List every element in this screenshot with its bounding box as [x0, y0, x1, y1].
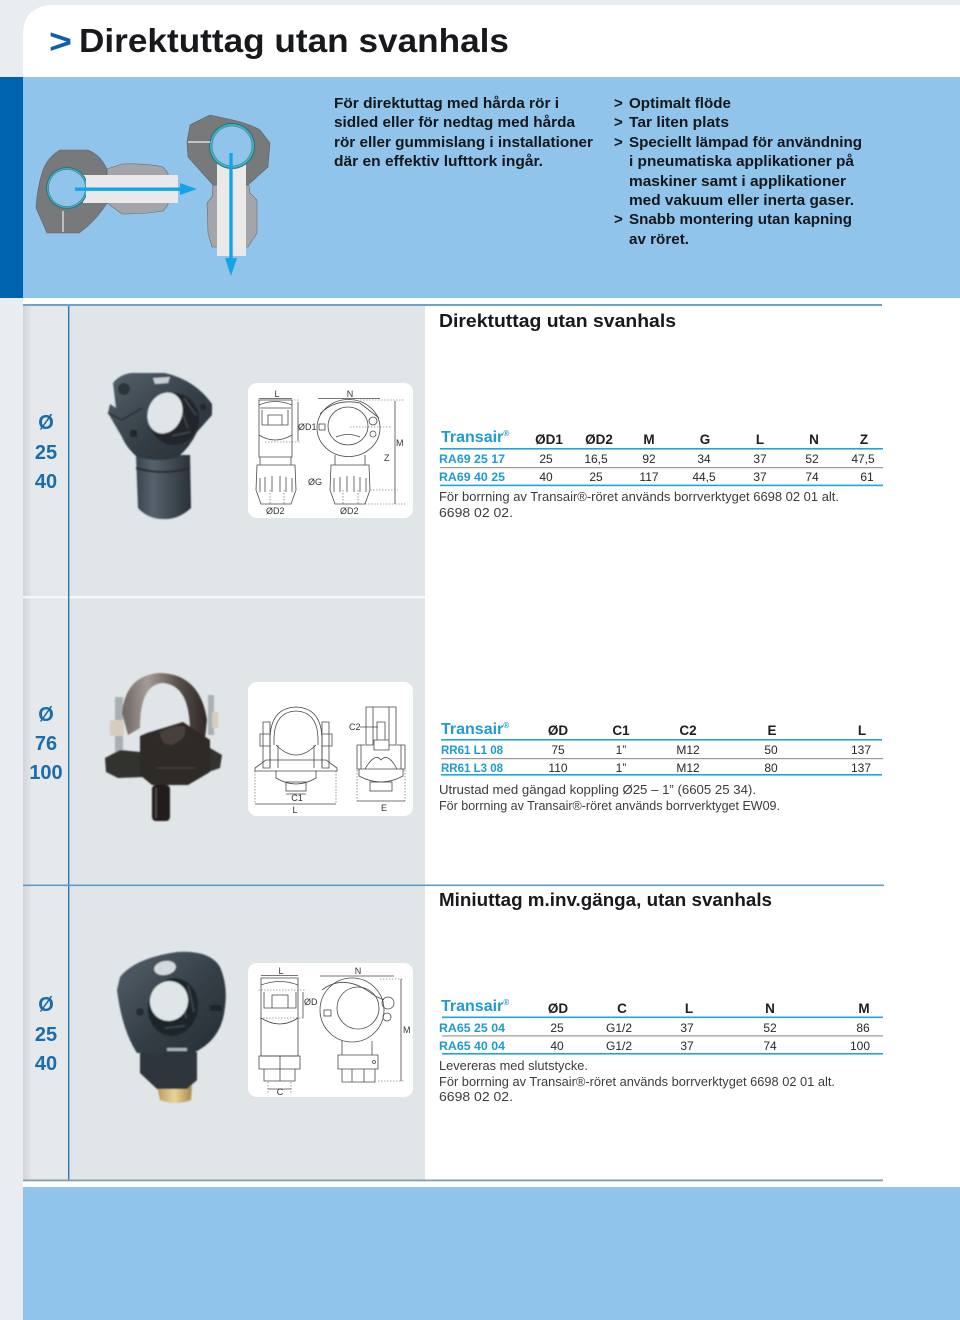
table: RR61: C2 — [679, 723, 697, 738]
benefits list: maskiner samt i applikationer — [629, 173, 846, 190]
technical drawing card: RA69 — [248, 383, 413, 518]
diameter labels: section 1: 25 — [35, 442, 57, 464]
table: RA65 — [439, 998, 883, 1055]
diameter labels: section 2 — [29, 704, 63, 784]
drawing: RA65 side view — [320, 976, 404, 1082]
diameter labels: section 3 — [35, 994, 57, 1075]
diameter labels: section 1 — [35, 412, 57, 493]
intro text: rör eller gummislang i installationer — [334, 134, 593, 151]
table: RA69: M — [643, 432, 655, 447]
note: RA69: 6698 02 02. — [439, 505, 513, 520]
table: RR61 — [441, 721, 883, 776]
benefits list — [614, 95, 862, 248]
dimension labels: RA69: ØG — [308, 477, 322, 487]
diameter labels: section 3: 40 — [35, 1053, 57, 1075]
table: RA65: RA65 25 04 — [439, 1021, 505, 1035]
table: RA69: Z — [860, 432, 868, 447]
dimension labels: RA69: Z — [384, 453, 390, 463]
table: RA65: 74 — [763, 1039, 777, 1053]
panel: grey product column — [23, 304, 884, 1181]
dimension labels: RA69: ØD2 — [266, 506, 285, 516]
table: RR61: C1 — [612, 723, 630, 738]
diameter labels: section 1: 40 — [35, 471, 57, 493]
table: RA69: Transair — [441, 429, 503, 446]
benefits list: i pneumatiska applikationer på — [629, 153, 855, 170]
table: RA69: 44,5 — [692, 470, 716, 484]
table: RR61: 110 — [548, 761, 568, 775]
table: RR61: 75 — [551, 743, 565, 757]
intro text: där en effektiv lufttork ingår. — [334, 153, 543, 170]
panel: intro band — [0, 77, 960, 298]
note: RA69: För borrning av Transair®-röret används borrverktyget 6698 02 01 alt. — [439, 489, 839, 504]
drawing: RA69 front view — [256, 398, 300, 505]
drawing: RA69 side view — [317, 398, 405, 505]
dimension labels: RA65: M — [403, 1025, 410, 1035]
benefits list: > — [614, 211, 623, 228]
note: RA65: För borrning av Transair®-röret används borrverktyget 6698 02 01 alt. — [439, 1074, 835, 1089]
benefits list: > — [614, 95, 623, 112]
diameter labels: section 2: 76 — [35, 733, 57, 755]
table: RR61: Transair — [441, 721, 503, 738]
diameter labels: section 2: 100 — [29, 762, 63, 784]
table: RA69: G — [700, 432, 710, 447]
table: RR61: 50 — [764, 743, 778, 757]
note: RA65: Levereras med slutstycke. — [439, 1058, 588, 1073]
dimension labels: RR61 — [291, 722, 387, 815]
table: RA65: RA65 40 04 — [439, 1039, 505, 1053]
table: RA65: G1/2 — [606, 1021, 632, 1035]
table: RA69: 61 — [860, 470, 874, 484]
dimension labels: RA69 — [266, 389, 404, 516]
table: RA65: 37 — [680, 1021, 694, 1035]
diameter labels: section 3: Ø — [38, 994, 54, 1016]
icon: side outlet diagram — [36, 150, 197, 233]
table: RA65: Transair — [441, 998, 503, 1015]
table: RA65: 100 — [850, 1039, 870, 1053]
photo: clamp outlet RA69 — [108, 373, 212, 519]
table: RR61: 80 — [764, 761, 778, 775]
diameter labels: section 3: 25 — [35, 1024, 57, 1046]
table: RR61: M12 — [676, 743, 700, 757]
dimension labels: RA69: N — [347, 389, 353, 399]
note: RR61 — [439, 782, 780, 813]
dimension labels: RA65: ØD — [304, 997, 318, 1007]
table: RR61: RR61 L3 08 — [441, 761, 503, 775]
table: RA69: 37 — [753, 470, 767, 484]
dimension labels: RA69: L — [274, 389, 280, 399]
dimension labels: RA65 — [277, 966, 410, 1097]
table: RA69: 37 — [753, 452, 767, 466]
table: RR61: 1” — [616, 761, 626, 775]
dimension labels: RA69: ØD1 — [298, 422, 317, 432]
benefits list: Tar liten plats — [629, 114, 729, 131]
dimension labels: RR61: L — [292, 805, 298, 815]
table: RR61: RR61 L1 08 — [441, 743, 503, 757]
table: RA69: 92 — [642, 452, 656, 466]
table: RA65: N — [765, 1001, 775, 1016]
drawing: RA65 front view — [258, 976, 305, 1094]
dimension labels: RA65: C — [277, 1087, 284, 1097]
table: RR61: 1” — [616, 743, 626, 757]
table: RA65: 52 — [763, 1021, 777, 1035]
photo: saddle outlet RR61 — [105, 673, 222, 821]
table: RA65: L — [685, 1001, 693, 1016]
dimension labels: RR61: C1 — [291, 793, 303, 803]
table: RA65: 40 — [550, 1039, 564, 1053]
photo: mini outlet RA65 — [117, 952, 226, 1103]
footer band — [23, 1187, 960, 1320]
dimension labels: RR61: C2 — [349, 722, 361, 732]
table: RA69: 25 — [589, 470, 603, 484]
benefits list: > — [614, 134, 623, 151]
table: RR61: ØD — [548, 723, 568, 738]
drawing: RR61 front view — [255, 707, 337, 804]
dimension labels: RA65: N — [355, 966, 361, 976]
intro text — [334, 95, 593, 170]
table: RA65: 25 — [550, 1021, 564, 1035]
table: RA69: RA69 40 25 — [439, 470, 505, 484]
dimension labels: RA65: L — [278, 966, 284, 976]
benefits list: Snabb montering utan kapning — [629, 211, 852, 228]
table: RA65: M — [858, 1001, 870, 1016]
note: RA69 — [439, 489, 839, 520]
table: RA69: 16,5 — [584, 452, 608, 466]
table: RA65: ØD — [548, 1001, 568, 1016]
intro text: sidled eller för nedtag med hårda — [334, 114, 576, 131]
icon: downward outlet diagram — [187, 115, 270, 276]
table: RA69: ØD2 — [585, 432, 613, 447]
table: RA69: 40 — [539, 470, 553, 484]
title: > — [49, 23, 72, 61]
table: RA65: G1/2 — [606, 1039, 632, 1053]
table: RA69: N — [809, 432, 819, 447]
table: RA69: L — [756, 432, 764, 447]
benefits list: Optimalt flöde — [629, 95, 731, 112]
dimension labels: RR61: E — [381, 803, 387, 813]
table: RA65: ® — [503, 998, 509, 1007]
note: RA65: 6698 02 02. — [439, 1089, 513, 1104]
diameter labels: section 1: Ø — [38, 412, 54, 434]
table: RA69: 74 — [805, 470, 819, 484]
dimension labels: RA69: ØD2 — [340, 506, 359, 516]
note: RA65 — [439, 1058, 835, 1104]
heading: section 1: Direktuttag utan svanhals — [439, 310, 676, 331]
table: RR61: E — [767, 723, 777, 738]
table: RR61: ® — [503, 721, 509, 730]
table: RA69: RA69 25 17 — [439, 452, 505, 466]
table: RA69: 34 — [697, 452, 711, 466]
table: RA65: 37 — [680, 1039, 694, 1053]
table: RA69: 25 — [539, 452, 553, 466]
heading: section 3: Miniuttag m.inv.gänga, utan svanhals — [439, 889, 772, 910]
benefits list: med vakuum eller inerta gaser. — [629, 192, 854, 209]
table: RA69: 52 — [805, 452, 819, 466]
table: RR61: L — [858, 723, 866, 738]
table: RR61: 137 — [851, 761, 871, 775]
title: Direktuttag utan svanhals — [79, 22, 509, 59]
table: RR61: M12 — [676, 761, 700, 775]
table: RA69: 117 — [639, 470, 659, 484]
benefits list: av röret. — [629, 231, 689, 248]
diameter labels: section 2: Ø — [38, 704, 54, 726]
table: RA69: ® — [503, 429, 509, 438]
table: RA69: 47,5 — [851, 452, 875, 466]
benefits list: > — [614, 114, 623, 131]
note: RR61: Utrustad med gängad koppling Ø25 – 1” (6605 25 34). — [439, 782, 756, 797]
technical drawing card: RR61 — [248, 682, 413, 816]
technical drawing card: RA65 — [248, 963, 413, 1097]
table: RA69: ØD1 — [535, 432, 563, 447]
table: RA65: 86 — [856, 1021, 870, 1035]
dimension labels: RA69: M — [396, 438, 404, 448]
drawing: RR61 end view — [357, 707, 405, 801]
intro text: För direktuttag med hårda rör i — [334, 95, 559, 112]
table: RA65: C — [617, 1001, 627, 1016]
table: RA69 — [439, 429, 883, 486]
benefits list: Speciellt lämpad för användning — [629, 134, 862, 151]
note: RR61: För borrning av Transair®-röret används borrverktyget EW09. — [439, 798, 780, 813]
table: RR61: 137 — [851, 743, 871, 757]
